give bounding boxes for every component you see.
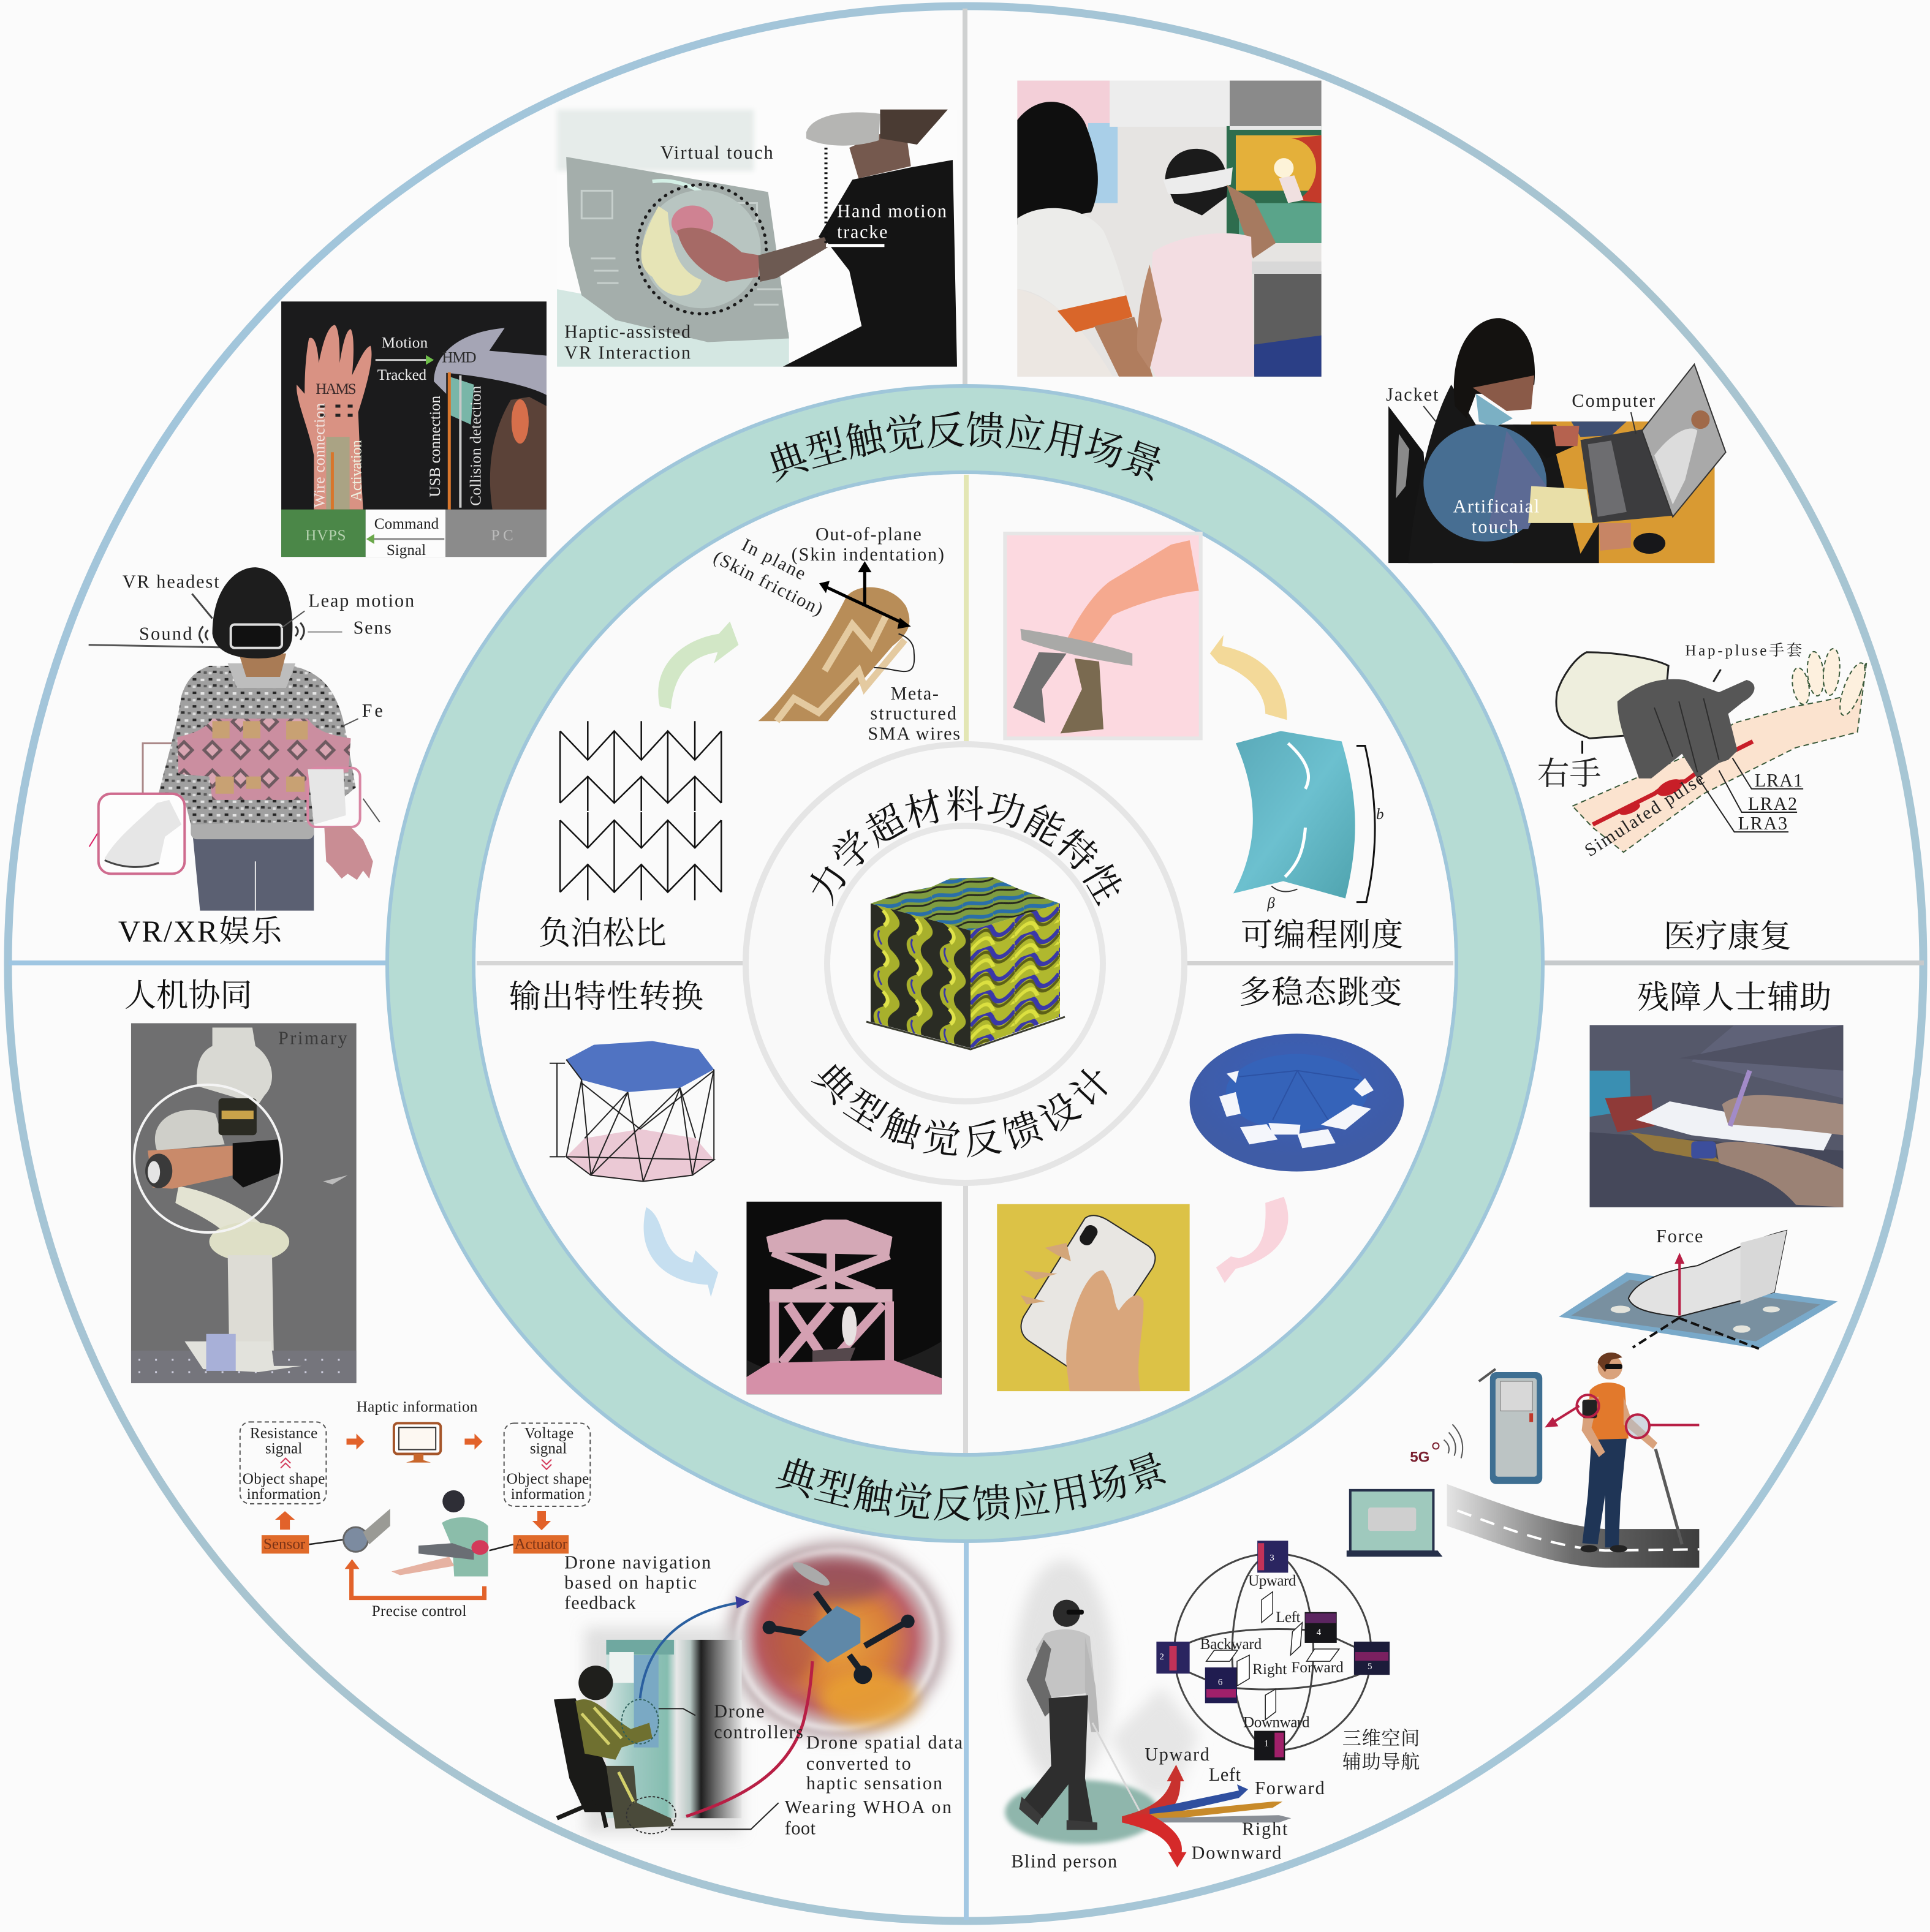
artery [1593,741,1753,824]
laptop screen [1642,364,1726,517]
icon: monitor [394,1423,441,1454]
numbered modules: 2 [1159,1652,1164,1662]
figure: haptic glove and pulse: LRA1 [1755,770,1803,791]
adult shirt [1017,208,1131,320]
figure: fingertip on plate [1559,1226,1837,1349]
teal application ring [387,386,1543,1541]
sound arcs [199,627,208,643]
heading: disability assistance: 残障人士辅助 [1637,979,1831,1015]
labels: Upward [1145,1744,1209,1765]
head [213,567,292,658]
person shirt [783,160,957,367]
arrow: pink [1216,1197,1288,1283]
figure: haptic glove and pulse: LRA2 [1748,793,1797,814]
HMD band [434,328,547,395]
cane [1656,1449,1682,1544]
figure: teal bent sheet: β [1266,896,1275,912]
figure: drone fire scene: feedback [564,1593,637,1613]
labels: Jacket [1386,384,1439,405]
photo: HAMS wearable schematic: PC [491,527,513,544]
figure: meta-structured finger: structured [870,703,956,723]
laptop [1350,1490,1433,1552]
photo: child with VR headset [1017,81,1322,377]
shoes [1581,1545,1598,1552]
photo: robot arm [131,1023,357,1383]
phantom fingers [1790,648,1870,718]
heading: human-machine collaboration: 人机协同 [124,978,252,1013]
figure: VR headset user: Sound [139,624,192,644]
photo: HAMS wearable schematic: HMD [442,350,476,366]
blue jacket [1423,425,1546,541]
figure: haptic glove and pulse: LRA3 [1738,813,1787,834]
labels: Drone navigation [564,1552,711,1572]
direction planes [1206,1592,1339,1720]
figure: haptic glove and pulse: Simulated pulse [1581,768,1708,861]
callout ellipses [622,1699,659,1744]
heading: multistable transition: 多稳态跳变 [1239,975,1402,1010]
figure: 3D navigation sphere: Right [1252,1661,1287,1678]
figure: haptic glove and pulse [1537,642,1870,861]
arrows [275,1433,551,1530]
hand [148,1145,234,1189]
QUADRANT 1: top-left [89,110,960,951]
figure: drone fire scene: foot [785,1817,816,1838]
figure: 3D navigation sphere: 辅助导航 [1342,1751,1420,1773]
adult hair [1017,102,1098,225]
lines [89,645,221,647]
jeans [192,828,314,911]
hem [191,818,314,839]
diagram: haptic control loop: Precise control [372,1603,466,1620]
photo: HAMS wearable schematic: Command [374,516,439,532]
HVPS box [281,510,366,557]
figure: meta-structured finger [710,524,960,744]
photo: remote medical consultation: Computer [1572,390,1655,411]
gripper [219,1098,257,1135]
photo: haptic VR interaction: Haptic-assisted [564,321,691,342]
diagram: haptic control loop: signal [265,1441,302,1457]
photo: HAMS wearable schematic: HAMS [316,381,357,398]
photo: HAMS wearable schematic: USB connection [427,395,444,497]
labels: VR headest [123,571,219,592]
photo: haptic VR interaction: tracke [837,222,887,243]
diagram: haptic control loop: Actuator [515,1536,568,1552]
center title top: 力学超材料功能特性 [810,786,1122,907]
numbered modules: 3 [1270,1553,1274,1563]
child [1165,149,1227,216]
5G signal: 5G [1410,1449,1429,1466]
figure: blind person walking with direction arrows: Right [1242,1818,1288,1839]
pointer arrows [1550,1406,1579,1424]
photo: remote medical consultation: touch [1472,516,1518,537]
phone [1490,1372,1542,1484]
hand and mouse [1599,523,1631,551]
figure: 3D navigation sphere: Left [1276,1609,1300,1626]
figure: 3D navigation sphere: 三维空间 [1342,1728,1420,1749]
sweater pink band [177,719,351,800]
forearm [1572,662,1867,852]
phone [1021,1215,1155,1369]
diagram: haptic control loop: Object shape [243,1471,325,1487]
figure: drone fire scene [554,1541,963,1838]
photo: robot arm: Primary [278,1028,347,1049]
figure: drone fire scene: haptic sensation [806,1773,942,1794]
labels: Virtual touch [660,142,773,163]
ring title top: 典型触觉反馈应用场景 [770,410,1160,483]
photo: phone in hand [997,1204,1190,1391]
inner dividers [477,475,1453,1453]
heading: programmable stiffness: 可编程刚度 [1241,918,1403,953]
hand [297,325,371,510]
photo: HAMS wearable schematic: Signal [387,542,426,559]
QUADRANT 3: bottom-left [124,978,963,1838]
figure: meta-structured finger: SMA wires [868,723,960,744]
figure: VR headset user: Leap motion [308,590,414,611]
photo: remote medical consultation [1386,318,1726,563]
rotated labels: Wire connection [311,403,328,508]
diagram: haptic control loop: Resistance [250,1425,317,1441]
robot joint [344,1527,368,1552]
figure: fingertip on plate: Force [1656,1226,1703,1247]
figure: haptic glove and pulse: 右手 [1537,757,1602,792]
figure: blind person walking with direction arrows: Blind person [1011,1851,1117,1872]
diagram: haptic control loop [240,1398,590,1620]
center rings [746,744,1184,1183]
numbered modules [1156,1541,1390,1760]
photo: remote medical consultation: Artificaial [1453,496,1539,517]
sensor box [262,1535,309,1553]
torso [1588,1383,1629,1440]
figure: VR headset user: Fe [362,700,383,721]
man [1053,1600,1080,1627]
glove [1618,679,1755,779]
arcs [640,1603,738,1698]
feedback loop [352,1566,485,1598]
figure: VR headset user [89,567,414,911]
arms [1582,1397,1605,1457]
heading: medical rehabilitation: 医疗康复 [1663,919,1792,954]
figure: blind person walking with direction arrows: Forward [1255,1778,1325,1798]
figure: blind person with cane and phone [1347,1353,1699,1568]
arrow: yellow [1210,635,1287,720]
figure: robotic hand on pink background [1005,534,1201,738]
photo: HAMS wearable schematic [281,301,547,559]
figure: drone fire scene: converted to [806,1753,911,1774]
head [1598,1355,1622,1379]
photo: haptic VR interaction: Hand motion [837,201,947,222]
actuator box [513,1535,569,1553]
figure: 3D navigation sphere: Downward [1243,1715,1310,1731]
direction arrows [1122,1765,1184,1822]
photo: HAMS wearable schematic: Collision detection [468,385,485,506]
figure: drone fire scene: controllers [714,1722,803,1743]
photo: HAMS wearable schematic: Tracked [377,367,427,383]
ring title bottom: 典型触觉反馈应用场景 [776,1452,1166,1522]
figure: teal bent sheet [1233,731,1384,912]
figure: drone fire scene: Drone [714,1700,765,1721]
lower right furniture [1254,265,1322,377]
diagram: haptic control loop: Voltage [524,1425,573,1441]
figure: meta-structured finger: In plane [738,534,809,584]
figure: 3D navigation sphere: Upward [1248,1573,1296,1590]
PC box [445,510,547,557]
figure: blue multistable disc [1190,1033,1404,1172]
jacket black [1408,385,1599,563]
figure: VR headset user: Sens [354,617,392,638]
operator backdrop [585,1628,741,1833]
headset [806,112,880,146]
figure: meta-structured finger: (Skin indentation) [792,544,944,565]
QUADRANT 2: top-right [1005,81,1870,954]
electrodes [320,406,353,415]
photo: handwriting setup [1590,1025,1843,1207]
heading: negative Poisson ratio: 负泊松比 [539,916,667,951]
laptop base [1581,429,1673,523]
hair [1454,318,1535,418]
labels: Hap-pluse手套 [1685,642,1802,659]
center title bottom: 典型触觉反馈设计 [811,1063,1107,1158]
photo: HAMS wearable schematic: HVPS [305,527,346,544]
arrow: blue [644,1207,718,1297]
heading: VR/XR entertainment: VR/XR娱乐 [118,914,282,948]
numbered modules: 5 [1368,1662,1372,1672]
figure: blind person walking with direction arrows: Downward [1192,1843,1281,1863]
dotted circle [637,184,766,314]
chair [1388,406,1432,563]
QUADRANT 4: bottom-right [997,975,1843,1872]
diagram: haptic control loop: Sensor [263,1536,306,1552]
figure: auxetic lattice [560,721,721,900]
numbered modules: 6 [1218,1677,1223,1687]
figure: drone fire scene: Drone spatial data [806,1732,963,1753]
gloved hand box [99,794,184,874]
desk [1513,421,1714,563]
photo: 3D printed lattice [746,1202,942,1394]
figure: 3D navigation sphere: Forward [1291,1659,1344,1676]
metamaterial cube [866,877,1065,1049]
hand [1020,1243,1071,1304]
figure: blind person walking with direction arrows [1005,1560,1325,1872]
photo: haptic VR interaction [557,110,957,367]
diagram: haptic control loop: information [511,1486,585,1503]
hand [324,826,373,880]
headset box [231,625,282,648]
figure: drone fire scene: based on haptic [564,1572,697,1593]
diagram: haptic control loop: information [247,1486,321,1503]
person [442,1490,464,1512]
figure: meta-structured finger: Meta- [891,683,939,704]
collar and neck [228,663,295,688]
figure: teal bent sheet: b [1376,806,1384,823]
armband [1583,1400,1597,1418]
arrow: green [658,622,738,709]
photo: HAMS wearable schematic: Motion [382,335,428,352]
numbered modules: 4 [1317,1628,1322,1637]
figure: octagonal lattice [550,1041,714,1182]
legs [1583,1438,1627,1547]
drone [763,1558,915,1684]
road [1447,1484,1699,1568]
diagram: haptic control loop: Haptic information [357,1398,478,1415]
box: voltage [504,1423,590,1506]
heading: output property conversion: 输出特性转换 [509,979,703,1014]
numbered modules: 1 [1264,1739,1269,1749]
photo: HAMS wearable schematic: Activation [349,440,365,502]
virtual panel [566,157,789,342]
face and mask [1473,375,1534,411]
figure: blind person walking with direction arrows: Left [1209,1764,1241,1785]
seated operator [554,1698,622,1812]
figure: 3D navigation sphere [1156,1541,1420,1773]
figure: meta-structured finger: Out-of-plane [816,524,921,545]
box: resistance [240,1422,326,1504]
figure: drone fire scene: Wearing WHOA on [785,1797,952,1817]
photo: haptic VR interaction: VR Interaction [564,342,691,363]
motion arrow [376,359,428,361]
figure: meta-structured finger: (Skin friction) [710,546,827,619]
diagram: haptic control loop: Object shape [507,1471,589,1487]
right wrist box [308,768,360,827]
figure: 3D navigation sphere: Backward [1200,1636,1262,1653]
sweater [157,666,356,824]
monitor painting [1227,126,1322,243]
cup [1556,652,1668,738]
magnifier circle [134,1085,282,1232]
diagram: haptic control loop: signal [530,1441,567,1457]
